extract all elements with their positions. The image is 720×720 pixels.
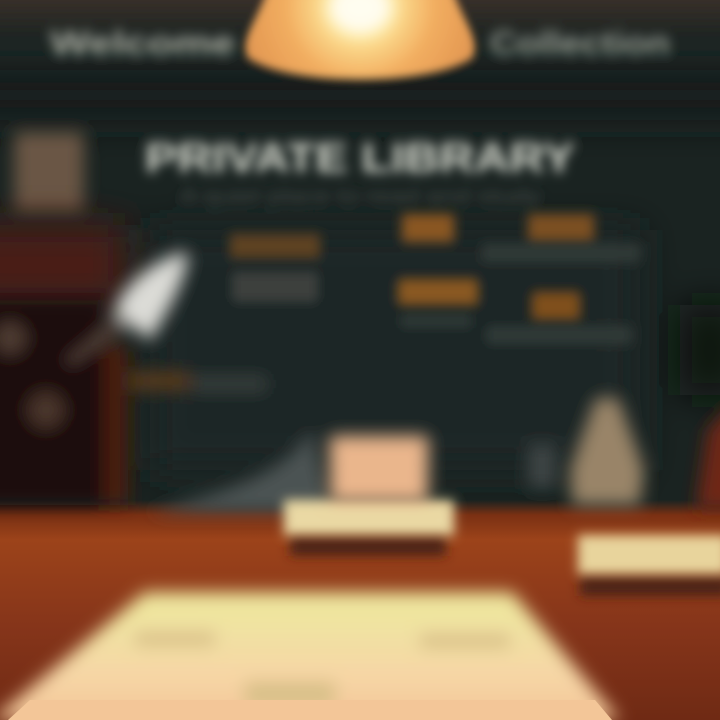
central book stack: [284, 436, 454, 556]
subheading: A quiet place to read and study: [180, 184, 540, 209]
panel: highlighted items: [230, 214, 640, 344]
quill feather: [62, 252, 188, 368]
paper sheet on table: [0, 592, 620, 720]
item text lower right: [486, 326, 632, 344]
background wall: [0, 0, 720, 470]
item text top right: [482, 244, 640, 262]
bookcase lower shelves: [0, 300, 128, 505]
top banner text: Welcome: [50, 25, 235, 61]
item heading lower right: [532, 292, 580, 320]
bookcase: [0, 225, 125, 305]
item heading left: [230, 234, 320, 258]
top banner text: Collection: [490, 25, 670, 61]
right book: [578, 535, 720, 596]
red object: [696, 398, 720, 510]
item heading top right: [528, 214, 594, 242]
small grey object: [528, 444, 556, 488]
heading: PRIVATE LIBRARY: [145, 134, 575, 181]
item text left: [232, 272, 318, 302]
top banner text: [50, 25, 670, 61]
paper bottom edge: [8, 700, 612, 720]
picture frame: [14, 132, 84, 212]
grey cloth shadow: [150, 430, 330, 512]
bottle: [570, 398, 644, 505]
small label by the feather: [128, 372, 268, 394]
item heading lower middle: [398, 279, 478, 305]
plant: [680, 305, 720, 395]
ceiling lamp: [245, 0, 475, 79]
paper text smudges: [135, 632, 510, 706]
item text lower middle: [400, 314, 472, 328]
item heading top middle: [402, 214, 454, 242]
